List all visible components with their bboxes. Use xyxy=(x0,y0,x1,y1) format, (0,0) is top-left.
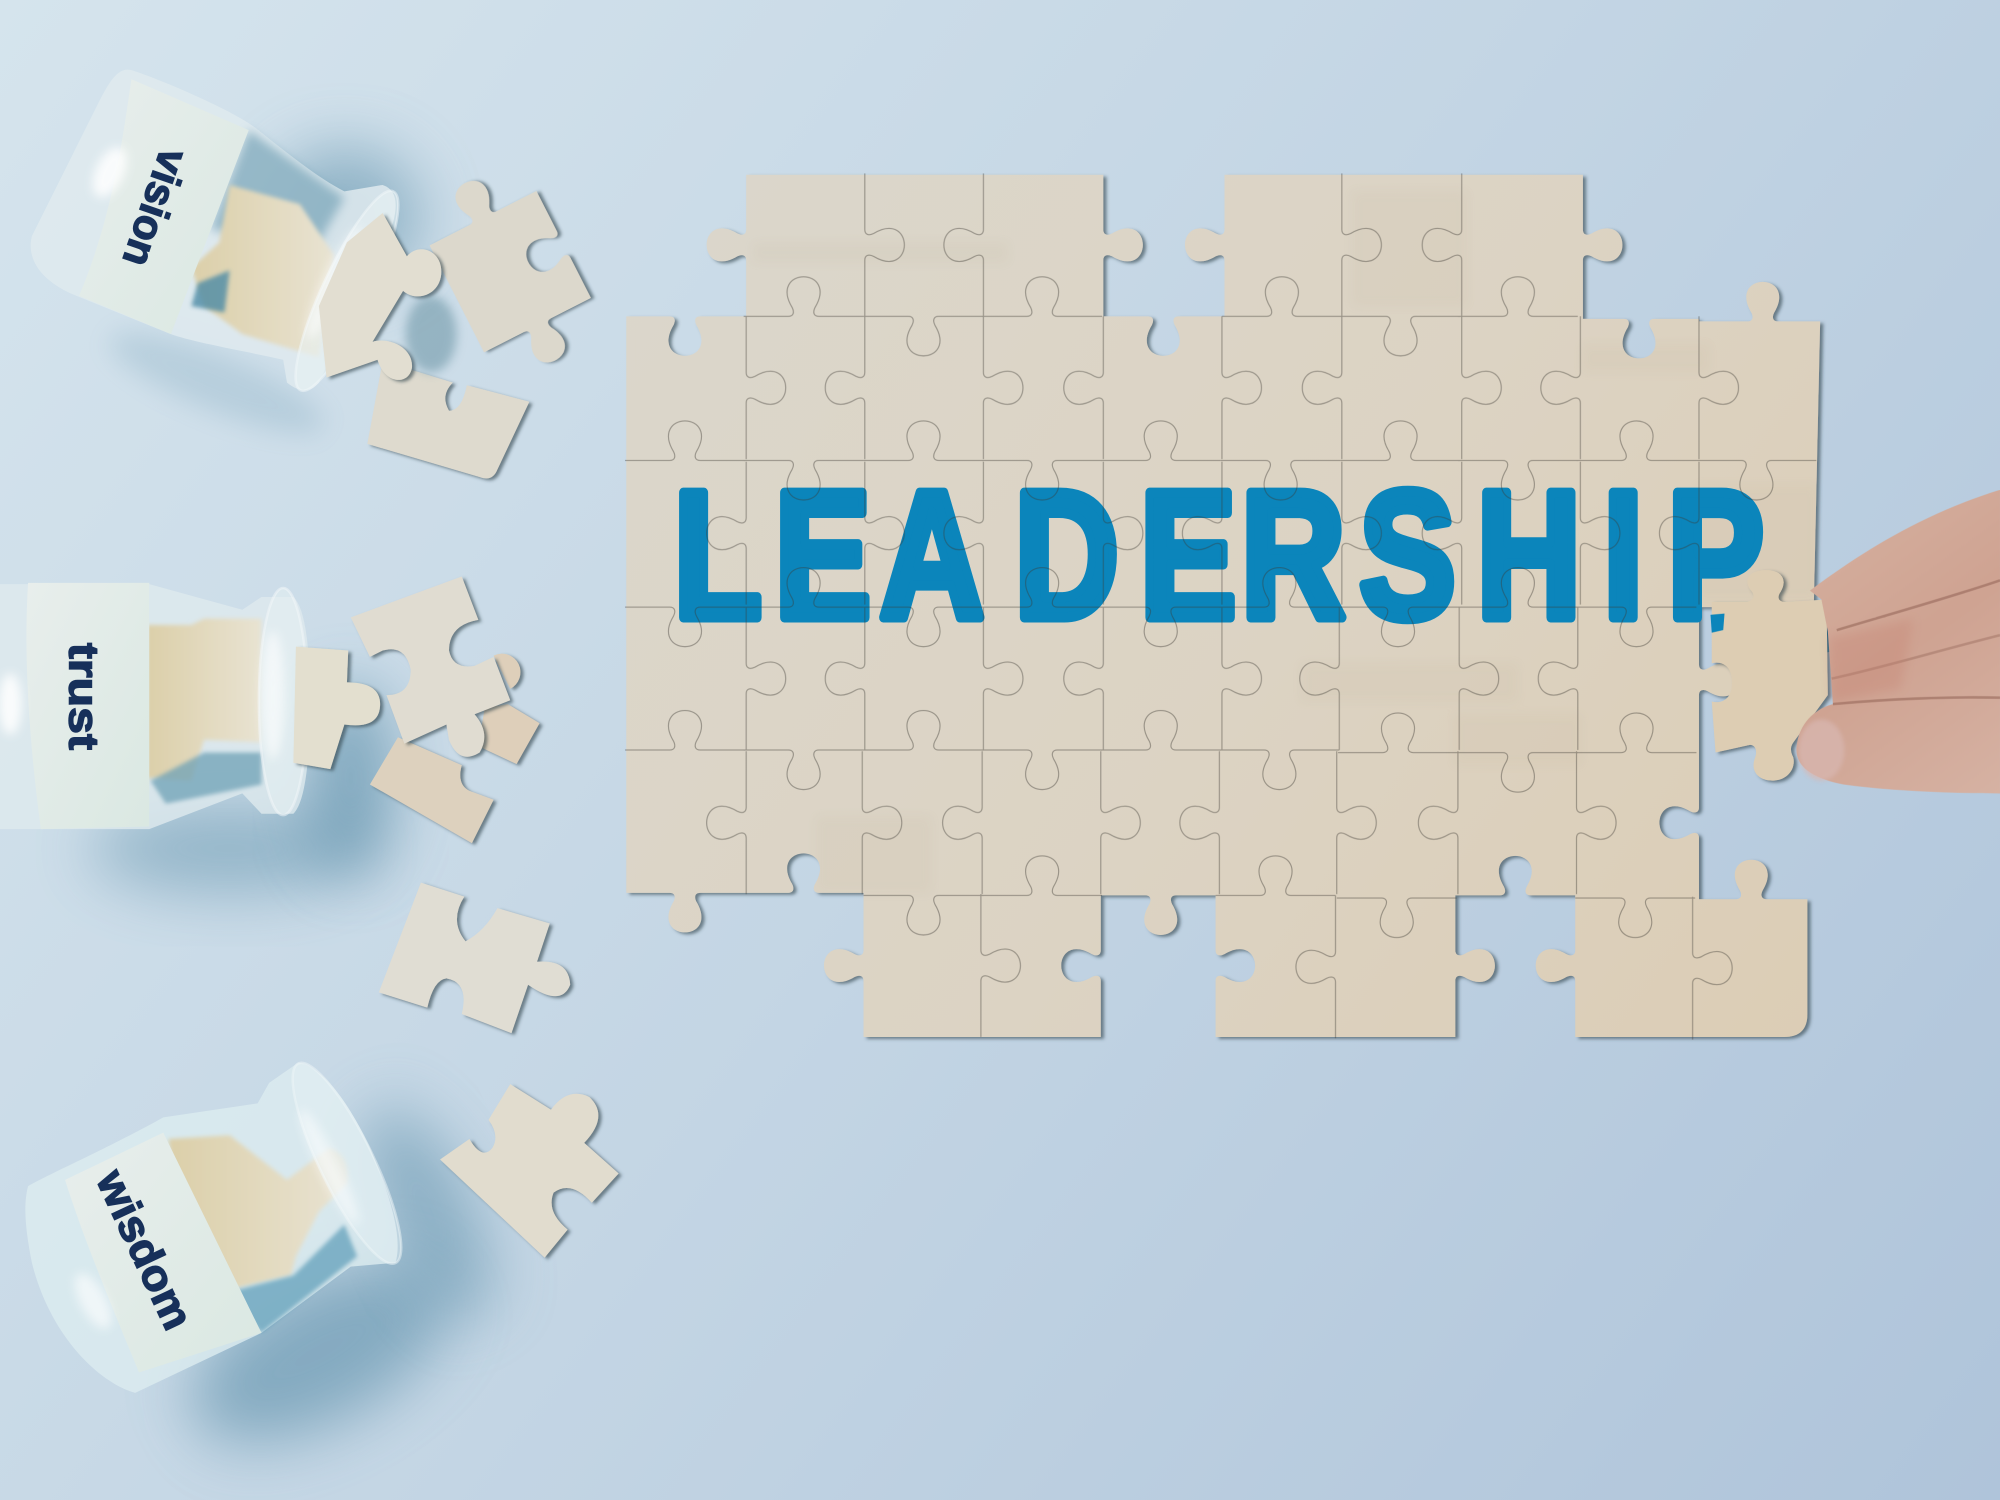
jar: vision xyxy=(31,70,441,400)
jar label band xyxy=(79,79,249,334)
piece emerging from jar xyxy=(319,213,441,380)
loose piece: middle xyxy=(379,883,570,1033)
loose piece: trust main xyxy=(351,577,510,757)
reddish mid fingers xyxy=(1829,619,1913,702)
jar lip xyxy=(279,181,415,400)
headline word: LEADERSHIP xyxy=(673,454,1764,656)
pieces inside jar xyxy=(191,185,334,357)
blue fragment behind hand xyxy=(1824,625,1849,653)
jar: trust xyxy=(0,583,380,829)
jar lip xyxy=(259,588,307,815)
jar highlight xyxy=(67,1268,119,1334)
jar lip xyxy=(274,1052,420,1275)
loose piece: behind lower trust jar xyxy=(370,737,494,843)
teal reflection xyxy=(223,1224,357,1333)
puzzle silhouette xyxy=(626,175,1820,1037)
jar label band xyxy=(26,583,149,829)
jar glass body xyxy=(25,1062,398,1393)
loose piece: corner piece xyxy=(367,361,529,478)
wood grain tones xyxy=(753,191,1818,893)
finger creases xyxy=(1832,580,2000,704)
jar highlight xyxy=(0,673,22,735)
teal reflection xyxy=(151,753,261,804)
P fragment on piece xyxy=(1710,614,1724,633)
held puzzle piece xyxy=(1712,570,1828,781)
jar label band xyxy=(65,1133,261,1372)
hand xyxy=(1796,490,2000,793)
pieces inside jar xyxy=(147,619,261,781)
puzzle seams xyxy=(625,173,1816,1040)
dark glass interior xyxy=(210,130,344,242)
pieces inside jar xyxy=(168,1135,348,1291)
loose piece: small tan xyxy=(478,654,540,764)
shade between top pieces xyxy=(406,296,457,372)
jar glass body xyxy=(0,584,310,829)
jar highlight xyxy=(86,142,134,202)
jar shadows xyxy=(89,147,516,1480)
lip highlight xyxy=(292,1105,366,1229)
lip highlight xyxy=(261,631,284,759)
jar glass body xyxy=(31,70,396,390)
hand shape xyxy=(1796,490,2000,793)
teal reflection xyxy=(191,270,230,312)
jar label text: wisdom xyxy=(86,1162,202,1337)
thumb nail xyxy=(1798,719,1844,781)
jar: wisdom xyxy=(25,1052,420,1393)
jar label text: vision xyxy=(114,143,198,273)
lip highlight xyxy=(298,223,370,344)
piece emerging from jar xyxy=(293,647,380,769)
loose piece: bottom xyxy=(440,1084,619,1258)
puzzle board xyxy=(625,173,1820,1040)
jar label text: trust xyxy=(61,643,108,750)
loose piece: top cross xyxy=(412,156,609,388)
